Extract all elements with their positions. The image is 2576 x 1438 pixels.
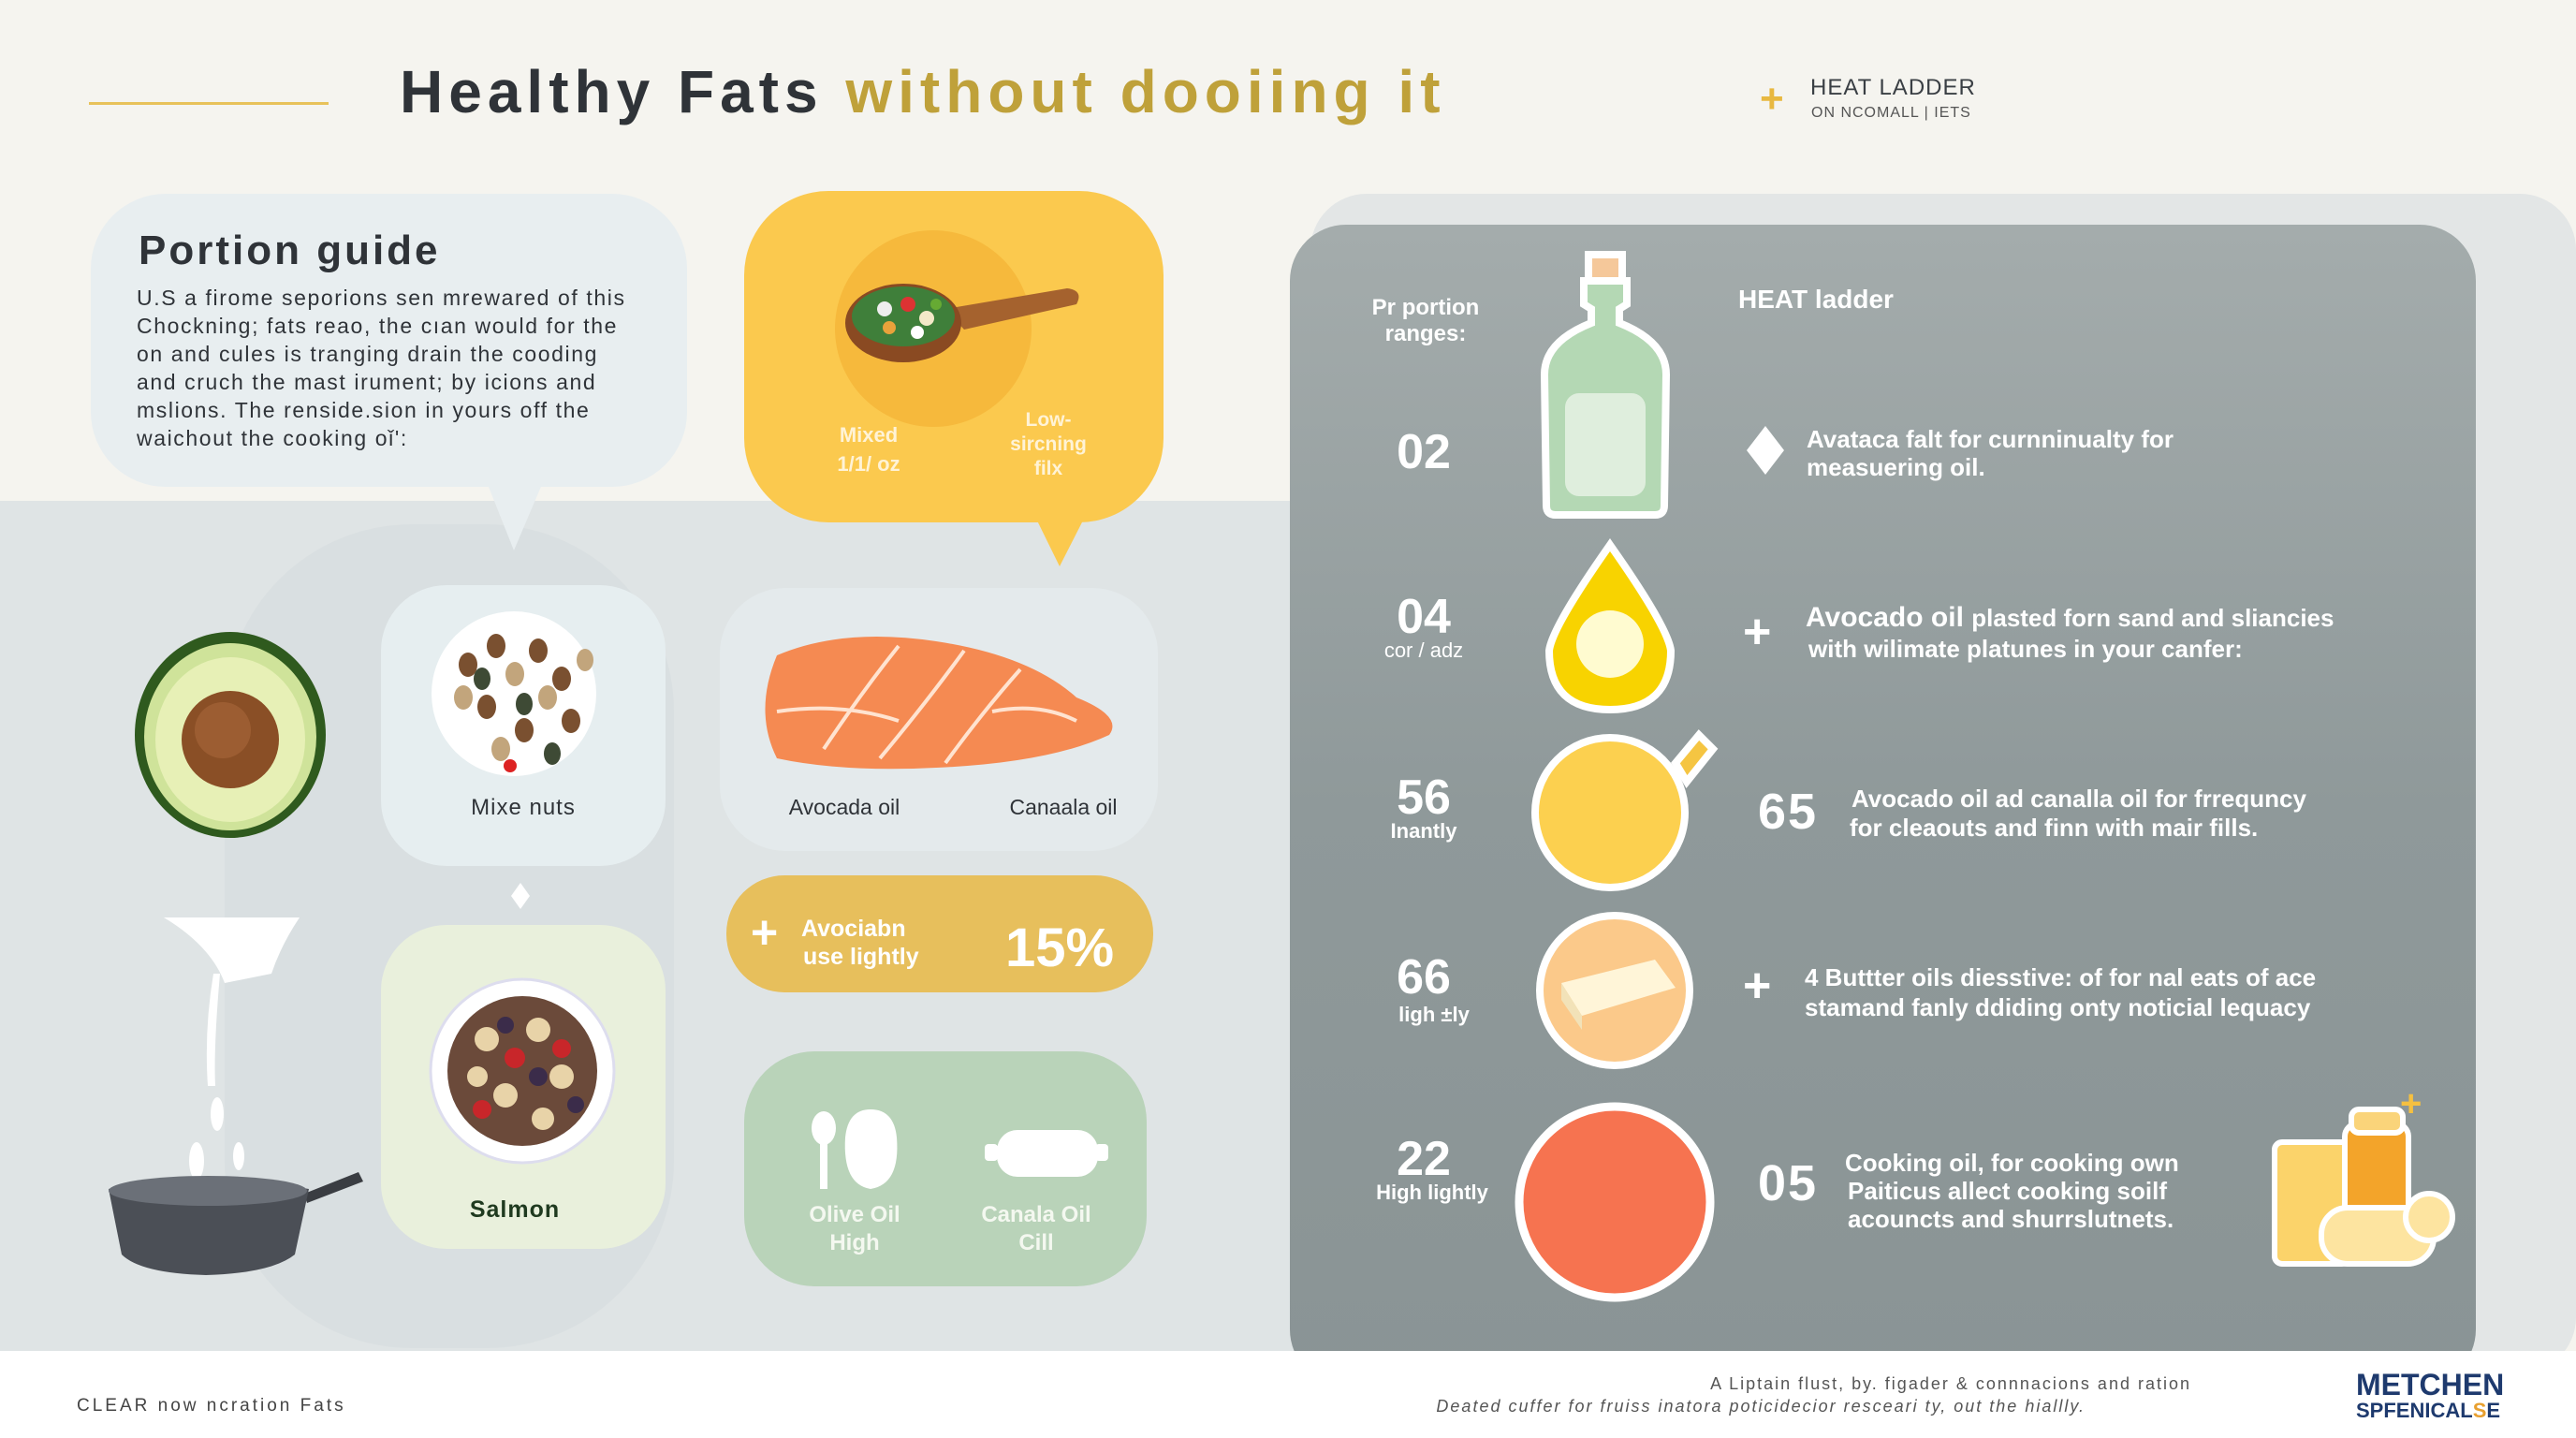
- numbers column: Inantly: [1391, 819, 1457, 843]
- header tag: heat ladder: HEAT LADDER: [1810, 75, 1976, 100]
- text block: portion guide body: and cruch the mast irument; by icions and: [137, 370, 596, 394]
- icon: small diamond: [511, 883, 530, 909]
- label: canaala oil: Canaala oil: [1009, 795, 1118, 819]
- label: mixe nuts: Mixe nuts: [471, 795, 576, 820]
- panel: heat ladder: +: [2400, 1083, 2422, 1124]
- rows text: for cleaouts and finn with mair fills.: [1850, 814, 2258, 842]
- logo: [2356, 1368, 2504, 1422]
- icon: red circle: [1519, 1107, 1710, 1298]
- numbers column: 02: [1397, 425, 1451, 479]
- card: salmon fillet: [720, 588, 1158, 851]
- logo: SPFENICALSE: [2356, 1399, 2500, 1422]
- rows text: Avocado oil ad canalla oil for frrequncy: [1852, 785, 2306, 813]
- heading: pr portion ranges: Pr portion: [1372, 295, 1479, 320]
- icon: bottle: [1544, 255, 1666, 515]
- numbers column: High lightly: [1376, 1181, 1489, 1204]
- icon: spoon: [845, 284, 1078, 362]
- panel: portion guide: [91, 194, 687, 550]
- rows text: Avataca falt for curnninualty for: [1807, 425, 2174, 453]
- numbers column: 66: [1397, 950, 1451, 1005]
- icon: olive oil: [812, 1109, 897, 1189]
- heading: portion guide: Portion guide: [139, 227, 441, 273]
- card: oils: Canala Oil: [981, 1202, 1091, 1227]
- header tag: heat ladder: ON NCOMALL | IETS: [1811, 105, 1971, 121]
- text block: portion guide body: U.S a firome seporions sen mrewared of this: [137, 286, 626, 310]
- text: mixed: 1/1/ oz: [837, 452, 900, 476]
- icon: avocado: [135, 632, 326, 838]
- logo: METCHEN: [2356, 1368, 2504, 1401]
- icon: butter circle: [1540, 916, 1690, 1065]
- numbers column: cor / adz: [1384, 638, 1463, 662]
- numbers column: 22: [1397, 1132, 1451, 1186]
- footer band: [0, 1351, 2576, 1438]
- text block: portion guide body: mslions. The renside.sion in yours off the: [137, 398, 590, 422]
- footer note: A Liptain flust, by. figader & connnacions and ration: [1710, 1374, 2191, 1393]
- title: Healthy Fats without dooiing it: [400, 58, 1445, 125]
- rows text: [1743, 425, 2334, 1233]
- rows text: 4 Buttter oils diesstive: of for nal eats of ace: [1805, 963, 2316, 991]
- text: low-sircning: sircning: [1010, 433, 1087, 455]
- text block: portion guide body: on and cules is tranging drain the cooding: [137, 342, 598, 366]
- rows text: acouncts and shurrslutnets.: [1848, 1205, 2174, 1233]
- rows text: Cooking oil, for cooking own: [1845, 1149, 2179, 1177]
- header tag: heat ladder: [1760, 75, 1976, 122]
- text block: portion guide body: waichout the cooking oǐ':: [136, 426, 408, 450]
- header tag: heat ladder: +: [1760, 76, 1784, 122]
- pill: use lightly 15%: Avociabn: [801, 916, 906, 942]
- rows text: Avocado oil plasted forn sand and sliancies: [1806, 602, 2334, 633]
- pill: use lightly 15%: use lightly: [803, 944, 919, 970]
- heading: pr portion ranges: [1372, 295, 1479, 346]
- rows text: 05: [1758, 1155, 1818, 1211]
- card: salmon bowl: [381, 925, 666, 1249]
- rows text: 65: [1758, 784, 1818, 840]
- rows text: +: [1743, 959, 1771, 1013]
- card: oils: [744, 1051, 1147, 1286]
- pill: use lightly 15%: [726, 875, 1153, 992]
- panel: heat ladder: [1290, 225, 2476, 1386]
- label: salmon: Salmon: [470, 1196, 560, 1223]
- card: oils: High: [829, 1230, 880, 1255]
- icon: canola oil: [985, 1130, 1108, 1177]
- icon: pan with pour: [109, 917, 363, 1275]
- rows text: Paiticus allect cooking soilf: [1848, 1177, 2167, 1205]
- rows text: with wilimate platunes in your canfer:: [1808, 635, 2243, 663]
- numbers column: 56: [1397, 770, 1451, 825]
- rows text: stamand fanly ddiding onty noticial lequacy: [1805, 993, 2311, 1021]
- pill: use lightly 15%: +: [751, 906, 778, 959]
- rows text: +: [1743, 605, 1771, 659]
- text: mixed: [837, 423, 900, 476]
- text block: portion guide body: Chockning; fats reao, the cıan would for the: [137, 314, 618, 338]
- numbers column: [1376, 425, 1489, 1204]
- text: low-sircning: [1010, 409, 1087, 479]
- icon: bowl: [431, 979, 614, 1163]
- heading: heat ladder: HEAT ladder: [1738, 285, 1894, 314]
- text block: portion guide body: [136, 286, 626, 450]
- icon: drinks: [2275, 1109, 2452, 1264]
- numbers column: 04: [1397, 590, 1451, 644]
- title rule: [89, 102, 329, 105]
- card: oils: Olive Oil: [809, 1202, 900, 1227]
- label: avocada oil: Avocada oil: [789, 795, 900, 819]
- text: mixed: Mixed: [840, 423, 898, 447]
- footer note: Deated cuffer for fruiss inatora poticidecior resceari ty, out the hiallly.: [1436, 1397, 2086, 1416]
- pill: use lightly 15%: 15%: [1005, 917, 1114, 978]
- text: low-sircning: filx: [1034, 458, 1062, 479]
- footer left: CLEAR now ncration Fats: [77, 1396, 346, 1416]
- icon: nuts: [432, 611, 596, 776]
- footer note: [1436, 1374, 2191, 1416]
- panel: mixed spoon bubble: [744, 191, 1164, 566]
- text: low-sircning: Low-: [1026, 409, 1071, 431]
- icon: drop: [1549, 545, 1671, 710]
- numbers column: ligh ±ly: [1398, 1003, 1471, 1026]
- icon: salmon: [766, 637, 1112, 769]
- icon: yellow circle: [1535, 735, 1713, 888]
- rows text: measuering oil.: [1807, 453, 1985, 481]
- heading: pr portion ranges: ranges:: [1385, 321, 1466, 346]
- card: mixe nuts: [381, 585, 666, 866]
- card: oils: Cill: [1018, 1230, 1054, 1255]
